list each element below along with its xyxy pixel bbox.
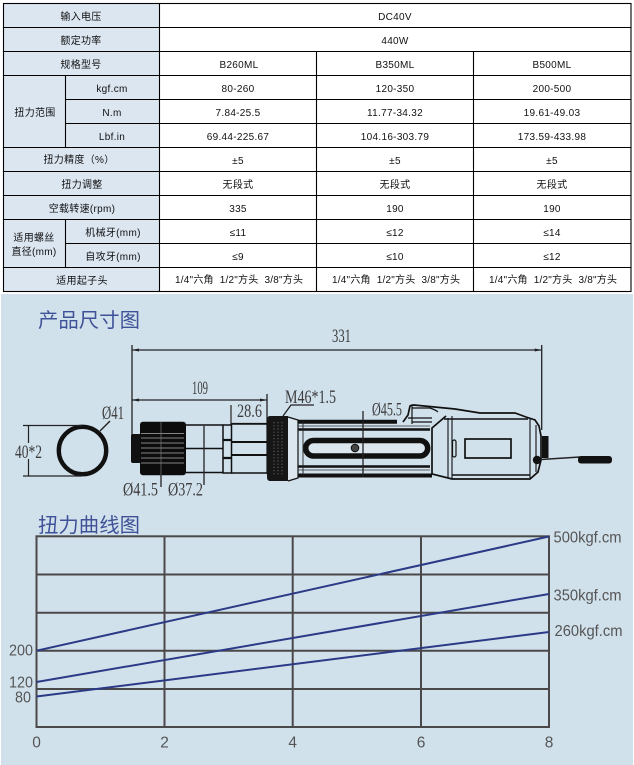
- table values: 190: [386, 204, 404, 215]
- 28.6 dimension: [231, 401, 267, 425]
- 28.6 dimension: 28.6: [237, 401, 262, 422]
- heading: torque curve: 扭力曲线图: [38, 514, 140, 537]
- x axis labels: 6: [417, 734, 425, 751]
- chart lines: [36, 536, 549, 696]
- series labels: 500kgf.cm: [554, 529, 622, 546]
- table values: 190: [543, 204, 561, 215]
- row labels: 规格型号: [60, 58, 102, 71]
- table values: 1/4"六角 1/2"方头 3/8"方头: [332, 273, 460, 286]
- row labels: N.m: [102, 108, 122, 119]
- overall length dimension: [132, 326, 542, 462]
- row labels: Lbf.in: [99, 132, 125, 143]
- table values: ≤10: [386, 252, 404, 263]
- panel: drawing and chart background: [1, 294, 633, 765]
- tool nose: [123, 422, 267, 500]
- torque line chart: [9, 529, 622, 751]
- row labels: 适用螺丝: [13, 232, 55, 244]
- row labels: 扭力范围: [14, 106, 56, 119]
- row labels: 扭力精度（%）: [44, 153, 114, 166]
- table values: 200-500: [533, 84, 572, 95]
- row labels: 空载转速(rpm): [49, 202, 115, 215]
- row labels: 扭力调整: [61, 178, 103, 191]
- table values: B260ML: [219, 60, 259, 71]
- row labels: kgf.cm: [96, 84, 128, 95]
- row labels: [11, 10, 141, 287]
- table values: 440W: [381, 36, 409, 47]
- 109 dimension: [132, 378, 267, 425]
- y axis labels: 120: [9, 674, 33, 691]
- tool handle: Ø45.5: [372, 400, 402, 420]
- table values: 104.16-303.79: [361, 132, 429, 143]
- tool rear body: [403, 405, 541, 479]
- table values: [175, 12, 617, 286]
- x axis labels: 8: [545, 734, 553, 751]
- overall length dimension: 331: [332, 326, 351, 347]
- 109 dimension: 109: [192, 378, 208, 399]
- table grid: [4, 4, 631, 292]
- table label cell backgrounds: [4, 4, 159, 292]
- table values: 无段式: [223, 178, 253, 191]
- y axis labels: 200: [9, 643, 33, 660]
- table values: ≤12: [543, 252, 561, 263]
- table values: 80-260: [222, 84, 255, 95]
- y axis labels: 80: [15, 689, 31, 706]
- series labels: [554, 529, 622, 640]
- power cord: [533, 436, 612, 464]
- icon: ring end view: [15, 403, 124, 476]
- panel: specification table: [4, 4, 631, 292]
- table values: ±5: [232, 156, 244, 167]
- row labels: 直径(mm): [11, 245, 57, 258]
- y axis labels: [9, 643, 33, 706]
- row labels: 适用起子头: [56, 275, 108, 287]
- table values: ≤14: [543, 228, 561, 239]
- x axis labels: 2: [160, 734, 169, 751]
- table values: DC40V: [378, 12, 412, 23]
- row labels: 自攻牙(mm): [85, 250, 141, 263]
- table values: 19.61-49.03: [524, 108, 580, 119]
- row labels: 输入电压: [60, 10, 102, 23]
- table values: ≤11: [230, 228, 247, 239]
- table values: ±5: [389, 156, 401, 167]
- series labels: 260kgf.cm: [554, 623, 622, 640]
- table values: 7.84-25.5: [216, 108, 261, 119]
- chart grid: [36, 536, 549, 727]
- table values: 1/4"六角 1/2"方头 3/8"方头: [489, 273, 617, 286]
- table values: 1/4"六角 1/2"方头 3/8"方头: [175, 273, 303, 286]
- row labels: 额定功率: [60, 34, 102, 47]
- tool nose: Ø41.5: [123, 480, 158, 500]
- dimension drawing: [15, 326, 612, 500]
- icon: ring end view: Ø41: [102, 403, 124, 424]
- tool nose: Ø37.2: [168, 480, 203, 500]
- heading: product dimensions: 产品尺寸图: [38, 309, 140, 332]
- table values: ≤12: [386, 228, 404, 239]
- icon: ring end view: 40*2: [15, 442, 42, 463]
- x axis labels: 4: [288, 734, 297, 751]
- knurled nut: [267, 387, 336, 481]
- table values: 无段式: [537, 178, 567, 191]
- knurled nut: M46*1.5: [285, 387, 336, 408]
- row labels: 机械牙(mm): [85, 226, 141, 239]
- table values: 120-350: [376, 84, 415, 95]
- table values: ≤9: [232, 252, 244, 263]
- series labels: 350kgf.cm: [554, 588, 622, 605]
- x axis labels: 0: [32, 734, 41, 751]
- table values: B500ML: [532, 60, 572, 71]
- table values: 11.77-34.32: [367, 108, 423, 119]
- table values: ±5: [546, 156, 558, 167]
- table values: 335: [229, 204, 247, 215]
- tool handle: [298, 400, 432, 477]
- x axis labels: [32, 734, 553, 751]
- table values: 69.44-225.67: [207, 132, 269, 143]
- table values: B350ML: [375, 60, 415, 71]
- table values: 173.59-433.98: [518, 132, 586, 143]
- table values: 无段式: [380, 178, 410, 191]
